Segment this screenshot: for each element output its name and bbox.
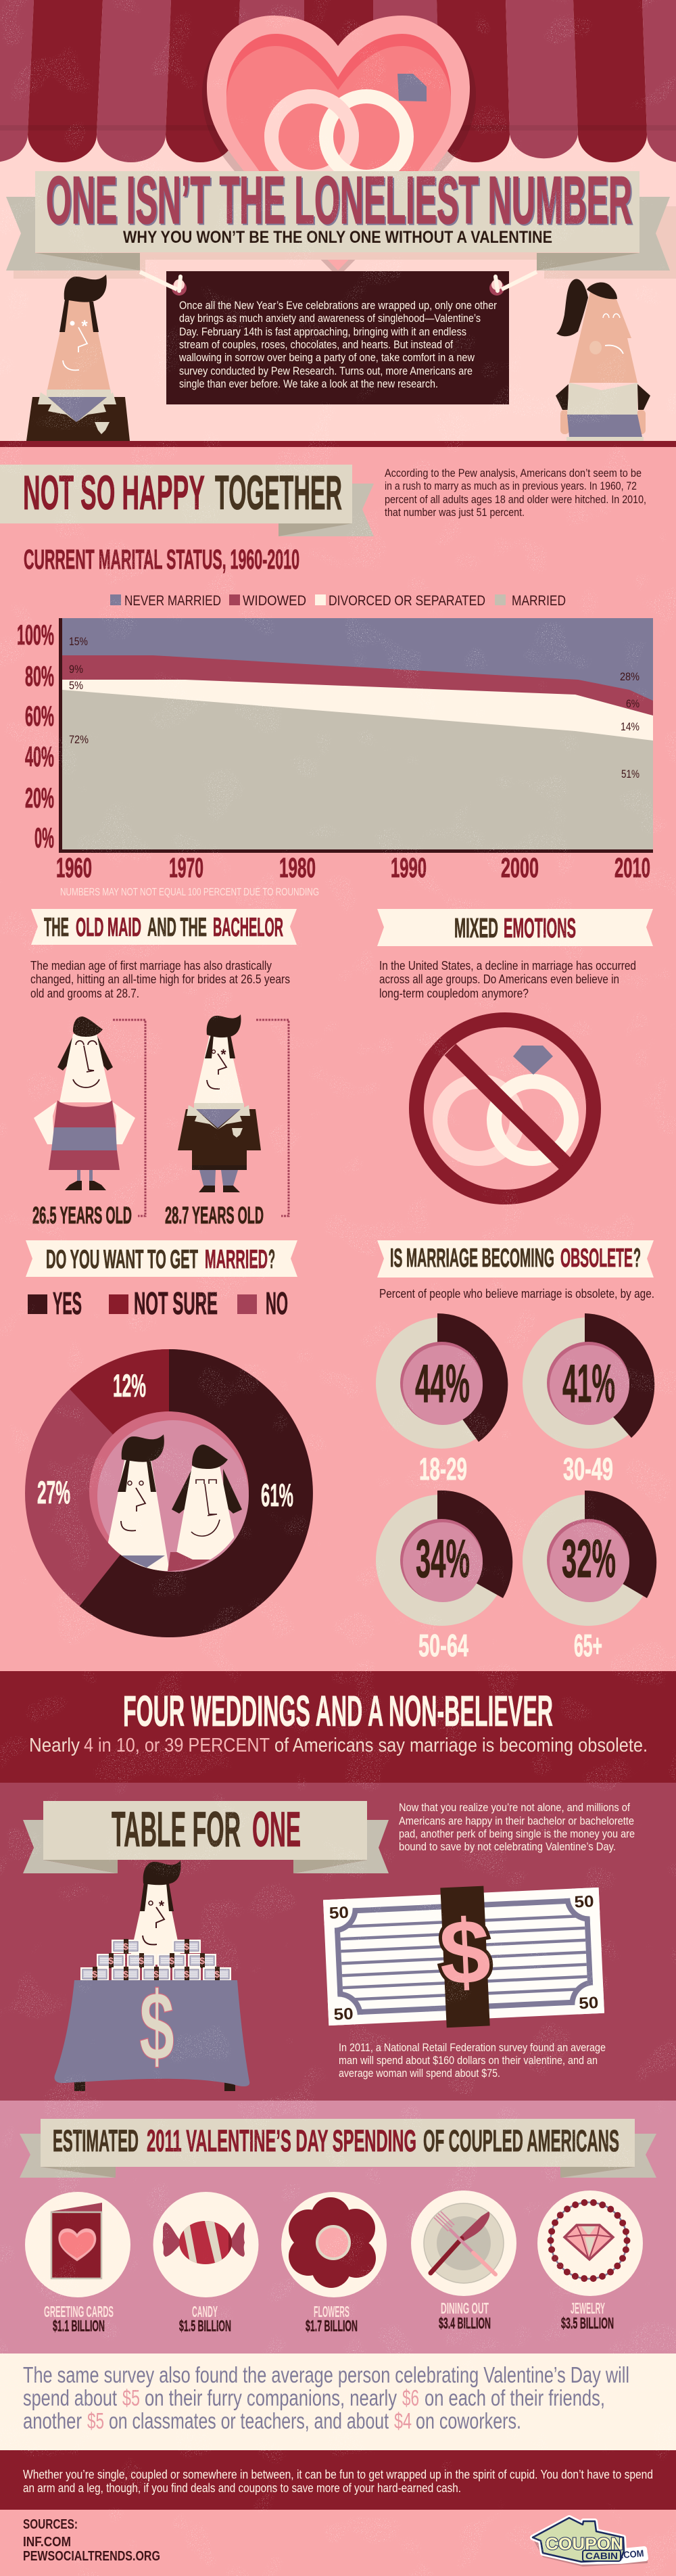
donut 30-49: 30-49 [563,1451,613,1486]
heart with rings [202,16,476,277]
paragraph: man will spend about $160 dollars on their valentine, and an [339,2054,598,2067]
panel: closing paragraph: an arm and a leg, though, if you find deals and coupons to save more of your hard-earned cash. [23,2481,461,2495]
panel: four weddings [29,1687,648,1756]
money stacks: $ [92,1969,97,1980]
groom figure [178,1014,261,1192]
icon: plate with cutlery [411,2191,516,2296]
spending labels: $1.1 BILLION [53,2317,105,2335]
x axis labels: 1990 [391,852,427,883]
paragraph: across all age groups. Do Americans even believe in [379,973,619,986]
subheading: Nearly [29,1735,80,1756]
sources [23,2517,160,2564]
age labels: 28.7 YEARS OLD [165,1202,264,1229]
chart title: CURRENT MARITAL STATUS, 1960-2010 [24,544,299,575]
paragraph [399,1801,635,1853]
banner [20,2119,656,2178]
spending labels: GREETING CARDS [44,2303,114,2320]
x axis labels: 1960 [56,852,92,883]
legend [28,1286,288,1321]
spending labels: JEWELRY [571,2299,605,2317]
ribbon heading: DO YOU WANT TO GET [46,1245,198,1274]
chart legend: WIDOWED [243,593,306,609]
panel: not so happy together [0,465,646,536]
ribbon heading: BACHELOR [213,913,283,942]
dollar bill: 50 [579,1994,599,2013]
subheading [29,1735,648,1756]
table with dollar sign [55,1971,249,2091]
panel: survey paragraph: spend about [23,2385,117,2410]
ribbon heading: MARRIED [205,1245,268,1274]
subtitle: WHY YOU WON’T BE THE ONLY ONE WITHOUT A VALENTINE [123,228,552,247]
spending labels: CANDY [192,2303,218,2320]
data labels [69,635,639,780]
icon: candy [153,2192,258,2297]
subheading: 4 in 10, or 39 PERCENT [84,1735,270,1756]
intro sign [140,271,537,404]
ribbon heading: AND THE [147,913,207,942]
paragraph [339,2041,606,2080]
data labels: 6% [626,697,639,710]
sources: SOURCES: [23,2517,78,2532]
ribbon heading: MIXED [454,912,498,943]
woman illustration header [556,279,650,441]
paragraph: changed, hitting an all-time high for brides at 26.5 years [30,973,290,986]
table with dollar sign: $ [139,1971,174,2081]
paragraph: In the United States, a decline in marriage has occurred [379,959,636,973]
data labels: 15% [69,635,88,648]
title banner [6,162,676,279]
data labels: 72% [69,733,89,746]
chart legend: MARRIED [512,593,566,609]
money stacks: $ [199,1955,205,1966]
man illustration header [26,275,130,441]
dollar bill: 50 [333,2005,354,2024]
icon: greeting card [25,2192,130,2297]
y axis labels [17,619,54,853]
x axis labels: 1980 [279,852,316,883]
ribbon heading [377,909,653,946]
ribbon heading [26,1240,297,1277]
money stacks: $ [123,1969,128,1980]
dollar bill [323,1886,604,2028]
panel: estimated spending [20,2119,656,2335]
panel: mixed emotions [377,909,653,1197]
spending labels: FLOWERS [314,2303,349,2320]
donut labels: 61% [261,1477,293,1513]
panel: survey paragraph: on coworkers. [416,2408,521,2433]
x axis labels: 2010 [614,852,650,883]
donut 18-29: 44% [415,1353,470,1413]
panel: is marriage becoming obsolete [376,1240,656,1663]
age labels: 26.5 YEARS OLD [32,1202,132,1229]
donut 30-49: 41% [562,1353,615,1413]
panel: do you want to get married: NO [266,1286,288,1321]
groom figure: * [220,1047,226,1062]
panel: old maid and the bachelor [30,909,297,1229]
panel: not so happy together: TOGETHER [215,467,342,520]
bride figure [34,1016,135,1190]
spending labels: $1.5 BILLION [179,2317,231,2335]
data labels: 28% [620,670,639,683]
paragraph: average woman will spend about $75. [339,2067,500,2080]
donut 50-64: 50-64 [418,1628,468,1663]
spending labels: $3.4 BILLION [439,2314,491,2332]
paragraph: Now that you realize you’re not alone, and millions of [399,1801,630,1814]
man at table [128,1860,183,1965]
spending labels: DINING OUT [441,2299,489,2317]
x axis labels: 1970 [169,852,203,883]
paragraph [379,959,636,1000]
spending labels: $3.5 BILLION [561,2314,614,2332]
man illustration header: * [81,317,88,335]
y axis labels: 80% [25,660,54,692]
banner: ESTIMATED [53,2124,139,2158]
intro paragraph: that number was just 51 percent. [385,506,525,519]
money stacks: $ [169,1955,174,1966]
banner: TABLE FOR [112,1802,241,1857]
x axis labels [56,852,650,883]
panel: survey paragraph: $4 [394,2408,412,2433]
panel: survey paragraph: another [23,2408,82,2433]
icon: necklace with diamond [537,2191,643,2296]
banner: ONE [252,1802,301,1857]
paragraph: Americans are happy in their bachelor or bachelorette [399,1814,634,1827]
money stacks: $ [108,1955,114,1966]
y axis labels: 60% [25,700,54,732]
money stacks: $ [184,1969,189,1980]
intro text: Once all the New Year’s Eve celebrations are wrapped up, only one other [179,299,497,312]
panel: table for one [23,1801,635,2091]
donut 50-64 [376,1491,512,1663]
dollar bill: $ [437,1900,493,2005]
panel: survey paragraph: on each of their friends, [425,2385,605,2410]
area chart [17,618,653,883]
chart legend: NEVER MARRIED [124,593,221,609]
money stacks: $ [184,1941,189,1952]
banner tail [279,484,374,536]
groom age bracket [256,1020,289,1216]
donut 65+: 65+ [574,1628,602,1663]
donut 50-64: 34% [416,1528,470,1589]
spending labels: $1.7 BILLION [306,2317,358,2335]
icon: flower [281,2192,387,2297]
logo: coupon cabin: .COM [621,2548,644,2560]
chart legend [110,593,566,609]
panel: survey paragraph: $5 [122,2385,140,2410]
donut chart [25,1349,313,1637]
donut 65+ [523,1491,656,1663]
logo: coupon cabin: CABIN [585,2550,618,2561]
paragraph: The median age of first marriage has also drastically [30,959,272,973]
y axis labels: 100% [17,619,54,651]
paragraph [30,959,290,1000]
chart legend: DIVORCED OR SEPARATED [329,593,485,609]
ribbon heading: OLD MAID [76,913,141,942]
panel: survey paragraph: on their furry companions, nearly [145,2385,397,2410]
panel: do you want to get married [25,1240,313,1637]
banner [23,1801,389,1873]
x axis labels: 2000 [501,852,539,883]
bride age bracket [113,1020,145,1216]
intro paragraph [385,467,646,519]
ribbon heading: THE [44,913,69,942]
logo: coupon cabin: COUPON [546,2535,623,2554]
money stacks [80,1939,231,1982]
paragraph: pad, another perk of being single is the money you are [399,1827,635,1840]
sources: INF.COM [23,2535,71,2550]
donut labels [37,1367,293,1513]
ribbon heading: ? [268,1245,275,1274]
spending labels [44,2299,614,2335]
money stacks: $ [123,1941,128,1952]
intro text: stream of couples, roses, chocolates, and hearts. But instead of [179,338,453,351]
y axis labels: 20% [25,782,54,814]
money stacks: $ [139,1955,144,1966]
panel: survey paragraph: $5 [87,2408,104,2433]
heading: NOT SO HAPPY [23,467,205,520]
logo: coupon cabin [533,2518,648,2567]
donut labels: 12% [113,1367,146,1403]
sources: PEWSOCIALTRENDS.ORG [23,2549,160,2564]
ribbon heading: ? [633,1244,641,1273]
intro text [178,299,497,390]
paragraph: long-term coupledom anymore? [379,987,529,1000]
icon: prohibited rings [416,1020,594,1197]
donut 30-49 [523,1313,654,1486]
donut 18-29 [376,1313,508,1486]
panel: closing paragraph [23,2468,653,2495]
paragraph: old and grooms at 28.7. [30,987,139,1000]
money stacks: $ [214,1969,220,1980]
data labels: 5% [69,679,83,692]
ribbon heading: EMOTIONS [504,912,576,943]
data labels: 9% [69,663,83,676]
area chart: 0% [34,822,54,853]
panel: survey paragraph: on classmates or teachers, and about [109,2408,389,2433]
intro text: Day. February 14th is fast approaching, bringing with it an endless [179,325,466,338]
data labels: 14% [621,720,639,733]
donut 65+: 32% [562,1528,616,1589]
donut labels: 27% [37,1474,70,1510]
couple faces [101,1434,242,1576]
panel: survey paragraph: $6 [402,2385,419,2410]
man at table: * [159,1898,165,1914]
money stacks: $ [153,1969,159,1980]
dollar bill: 50 [574,1892,594,1911]
paragraph: In 2011, a National Retail Federation survey found an average [339,2041,606,2054]
y axis labels: 40% [25,741,54,772]
banner: 2011 VALENTINE’S DAY SPENDING [147,2124,416,2158]
paragraph: bound to save by not celebrating Valentine’s Day. [399,1840,616,1853]
panel: survey paragraph [23,2362,629,2433]
intro text: survey conducted by Pew Research. Turns out, more Americans are [179,365,473,377]
legend: YES [53,1286,82,1321]
dollar bill: 50 [329,1904,349,1923]
intro text: wallowing in sorrow over being a party of one, take comfort in a new [178,351,475,364]
footnote: NUMBERS MAY NOT NOT EQUAL 100 PERCENT DUE TO ROUNDING [60,887,319,898]
intro text: single than ever before. We take a look at the new research. [179,377,438,390]
intro text: day brings as much anxiety and awareness of singlehood—Valentine’s [179,312,481,325]
legend: NOT SURE [134,1286,218,1321]
donut 18-29: 18-29 [419,1451,467,1486]
ribbon heading [31,909,297,945]
awning [0,0,676,162]
data labels: 51% [621,768,639,780]
